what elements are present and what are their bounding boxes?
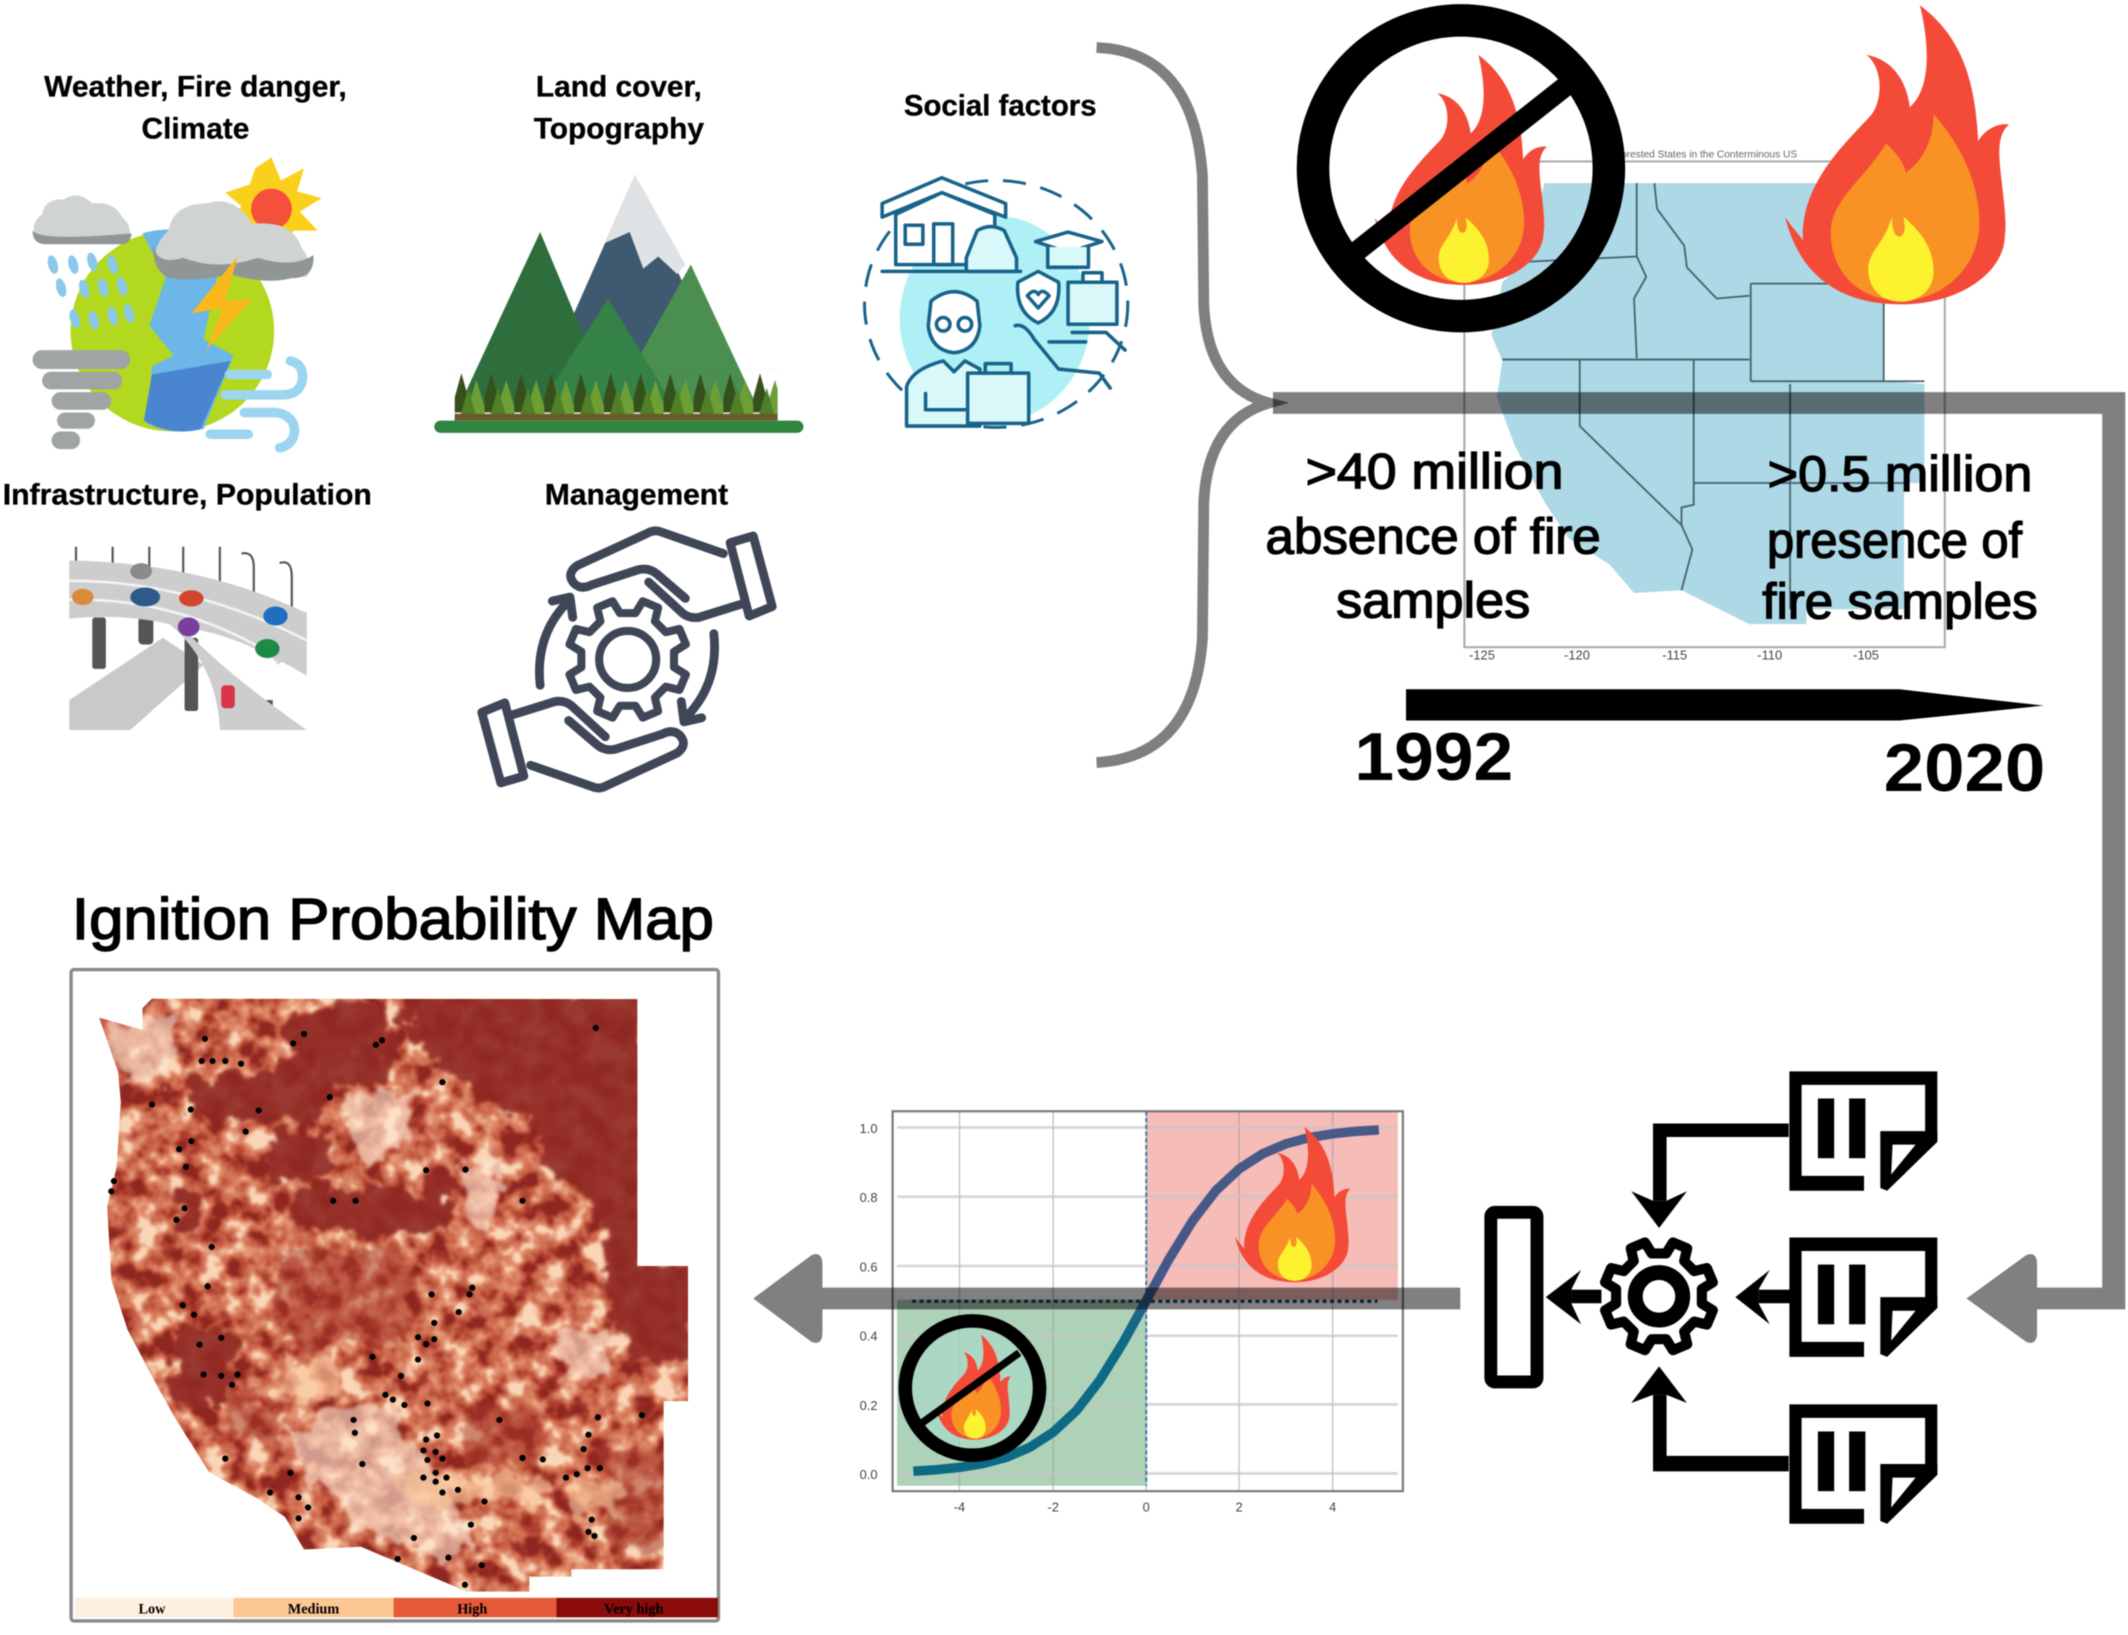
icon: output box — [1491, 1212, 1537, 1382]
label: land cover, topography: Topography — [534, 112, 704, 145]
map: western US states: Forested States in the Conterminous US — [1615, 149, 1797, 160]
label: social factors: Social factors — [904, 89, 1097, 122]
icon: document input top — [1789, 1071, 1937, 1191]
map: western US states: -120 — [1564, 647, 1590, 662]
chart: logistic probability curve: -2 — [1047, 1500, 1059, 1515]
icon: chart no fire sign — [905, 1321, 1040, 1455]
chart: logistic probability curve: 0.6 — [860, 1259, 878, 1274]
map legend: Medium — [288, 1601, 339, 1617]
map legend: Very high — [604, 1601, 663, 1617]
grey flow connector from inputs to model — [1273, 392, 2125, 1343]
map: western US states: -125 — [1469, 647, 1495, 662]
text: absence of fire samples: >40 million — [1306, 443, 1563, 499]
icon: highway infrastructure — [69, 547, 307, 730]
icon: document input middle — [1789, 1237, 1937, 1357]
timeline arrow — [1406, 689, 2044, 720]
chart: logistic probability curve: 1.0 — [860, 1121, 878, 1136]
label: weather, fire danger, climate: Climate — [142, 112, 249, 145]
icon: model gear — [1605, 1242, 1713, 1350]
chart: logistic probability curve: 0.0 — [860, 1467, 878, 1482]
icon: chart fire flame — [1235, 1127, 1350, 1282]
chart: logistic probability curve: 0 — [1143, 1500, 1150, 1515]
chart: logistic probability curve — [860, 1111, 1403, 1515]
icon: no fire sign — [1313, 20, 1609, 316]
icon: management hands and gear — [482, 531, 772, 788]
label: weather, fire danger, climate: Weather, Fire danger, — [44, 70, 347, 103]
curly brace — [1097, 47, 1269, 763]
grey arrow from model to map — [753, 1254, 1460, 1343]
arrow: middle document to gear — [1735, 1270, 1791, 1324]
map legend — [75, 1598, 718, 1617]
panel: ignition probability map — [71, 970, 718, 1621]
year end: 2020 — [1884, 731, 2045, 806]
icon: fire flame — [1785, 5, 2009, 304]
map: western US states: -110 — [1757, 647, 1782, 662]
label: management: Management — [545, 479, 728, 512]
map: western US states: -105 — [1853, 647, 1879, 662]
icon: social factors — [864, 178, 1128, 427]
chart: logistic probability curve: 0.4 — [860, 1329, 878, 1344]
text: absence of fire samples: absence of fire — [1266, 509, 1601, 565]
year start: 1992 — [1354, 720, 1513, 795]
label: land cover, topography: Land cover, — [536, 70, 702, 103]
map: western US states: -115 — [1662, 647, 1687, 662]
map legend: Low — [139, 1601, 166, 1617]
text: presence of fire samples: >0.5 million — [1768, 446, 2032, 502]
map legend: High — [457, 1601, 487, 1617]
chart: logistic probability curve: 0.2 — [860, 1398, 878, 1413]
chart: logistic probability curve: 4 — [1329, 1500, 1336, 1515]
chart: logistic probability curve: 0.8 — [860, 1190, 878, 1205]
arrow: gear to output — [1546, 1270, 1601, 1324]
icon: document input bottom — [1789, 1404, 1937, 1524]
label: infrastructure, population: Infrastructure, Population — [3, 479, 372, 512]
chart: logistic probability curve: 2 — [1235, 1500, 1243, 1515]
title: ignition probability map: Ignition Probability Map — [72, 887, 714, 952]
text: presence of fire samples: fire samples — [1762, 574, 2038, 630]
chart: logistic probability curve: -4 — [954, 1500, 965, 1515]
text: absence of fire samples: samples — [1336, 572, 1530, 628]
icon: mountains and forest — [434, 175, 803, 433]
text: presence of fire samples: presence of — [1767, 513, 2023, 569]
arrow: bottom document to gear — [1631, 1366, 1789, 1471]
icon: weather and climate globe — [33, 157, 322, 449]
arrow: top document to gear — [1631, 1123, 1789, 1228]
map: western US states — [1464, 149, 1945, 662]
